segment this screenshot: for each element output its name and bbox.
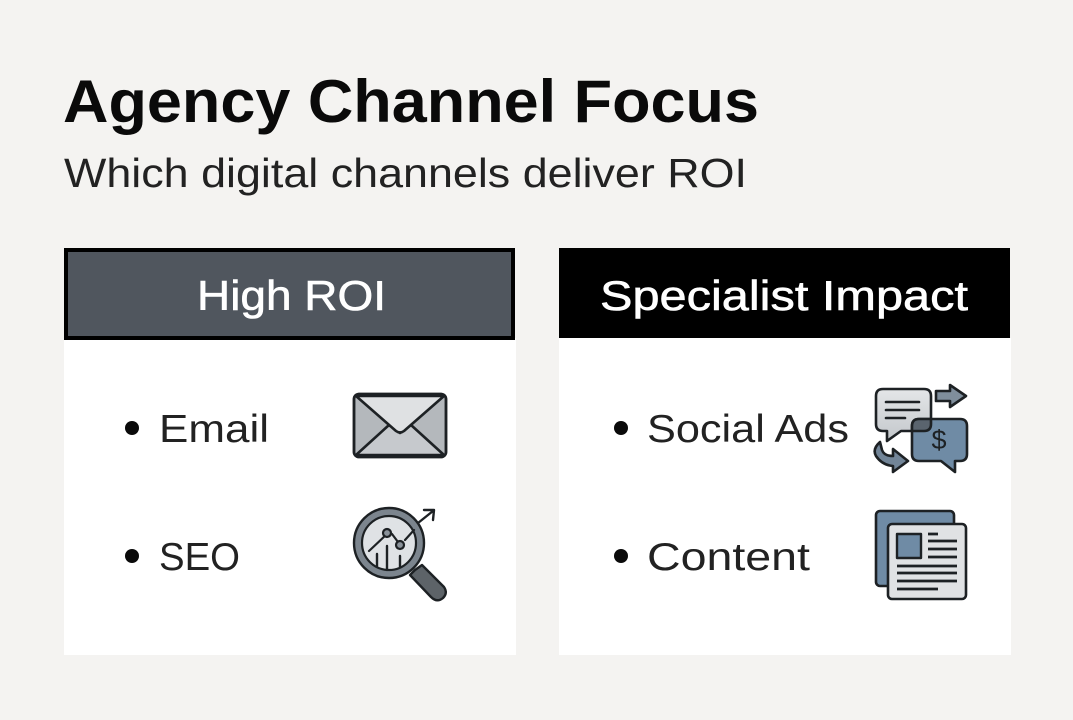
panel: High ROI [64, 250, 516, 655]
icon: envelope [354, 394, 446, 457]
header: Specialist Impact: Specialist Impact [600, 272, 968, 319]
panel body: Specialist Impact [559, 338, 1011, 655]
list item: Content: Content [647, 536, 810, 579]
list item: SEO: SEO [159, 536, 240, 579]
icon: newspaper [876, 511, 966, 599]
list item: Content [614, 536, 810, 579]
list item: Email: Email [159, 408, 269, 451]
list item: SEO [125, 536, 240, 579]
panel: Specialist Impact [559, 248, 1011, 655]
header: High ROI [66, 250, 513, 338]
icon: chat exchange: $ [931, 425, 947, 455]
title: Agency Channel Focus [63, 68, 759, 135]
list item: Email [125, 408, 269, 451]
panel body: High ROI [64, 338, 516, 655]
icon: magnifier chart [354, 508, 446, 600]
header: Specialist Impact [559, 248, 1010, 338]
icon: chat exchange [875, 385, 967, 472]
list item: Social Ads: Social Ads [647, 408, 849, 451]
subtitle: Which digital channels deliver ROI [64, 150, 747, 196]
header: High ROI: High ROI [197, 272, 386, 319]
